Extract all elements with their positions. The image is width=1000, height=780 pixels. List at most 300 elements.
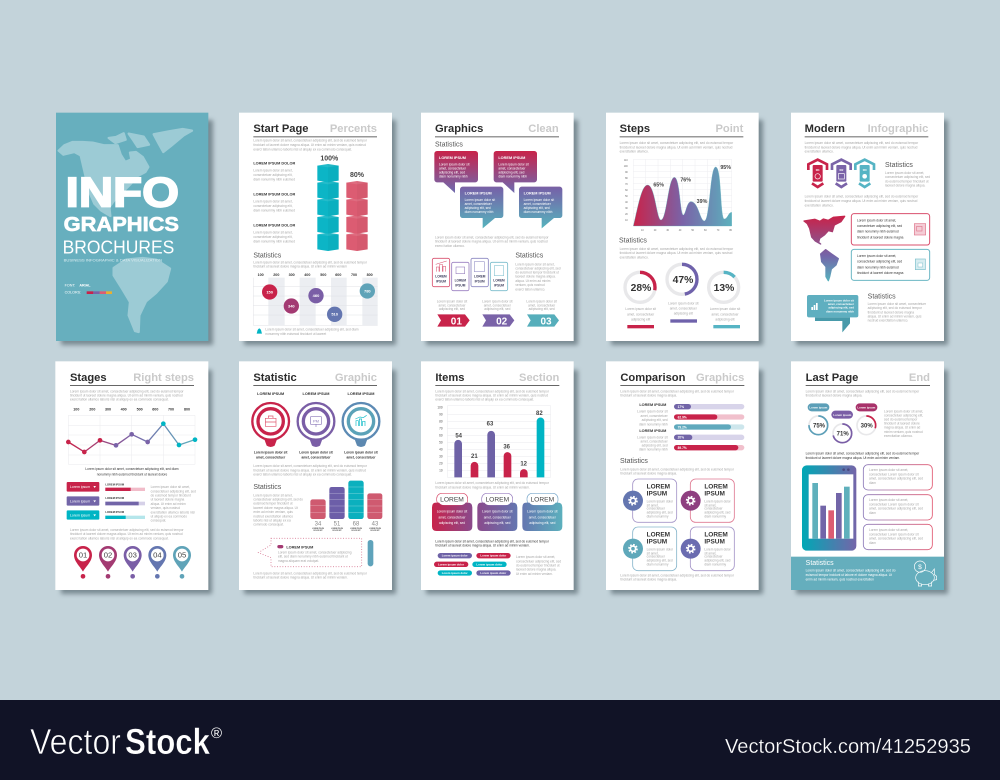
- side text: consectetuer adipiscing elit, sed: [151, 489, 196, 493]
- outlined text box 3: consectetuer Lorem ipsum dolor sit: [869, 532, 919, 536]
- statistics heading: Statistics: [885, 162, 913, 169]
- panel: modern: [791, 113, 944, 341]
- cover title: FONT:: [65, 284, 75, 288]
- column headers: LOREM IPSUM: [347, 392, 375, 396]
- side text: minim veniam, quis nostrud: [884, 430, 923, 434]
- bar chart: 50: [439, 441, 443, 445]
- ring badge: presentation: [298, 403, 334, 447]
- outlined text box 3: diam: [869, 541, 876, 545]
- statistics text: Lorem ipsum dolor sit amet, consectetuer: [868, 302, 927, 306]
- line chart: 100: [73, 408, 79, 412]
- bar chart: 30: [439, 455, 443, 459]
- body text: Lorem ipsum dolor sit amet, consectetuer adipiscing elit, sed do euismod tempor: [435, 235, 550, 239]
- heading: Items: [435, 372, 464, 384]
- line chart: 800: [184, 408, 190, 412]
- bubble chart: [253, 273, 378, 325]
- heading: Last Page: [806, 372, 858, 384]
- outlined text box 1: diam: [869, 481, 876, 485]
- heading: Comparison: [620, 372, 686, 384]
- cylinder stacks: LOREM IPSUM: [312, 528, 324, 530]
- brand logo: Stock: [125, 721, 211, 762]
- statistics text: tincidunt ut laoreet dolore magna aliqua. Ut enim ad minim veniam, quis nostrud: [620, 251, 733, 255]
- gear card 1: Lorem ipsum dolor: [647, 499, 674, 503]
- footer text: Lorem ipsum dolor sit amet, consectetuer adipiscing elit, sed do euismod tempor: [620, 573, 735, 577]
- bar chart: 82: [536, 411, 543, 417]
- area chart: 40: [625, 202, 628, 204]
- footer band: euismod tempor incidunt ut labore et dolore magna aliqua. Ut: [806, 573, 892, 577]
- footer band: Statistics: [806, 560, 834, 567]
- label pills: Lorem ipsum dolor: [442, 571, 468, 575]
- heading: Graphics: [696, 372, 744, 384]
- bar chart: 60: [439, 434, 443, 438]
- tab card 1: amet, consectetuer: [438, 515, 466, 519]
- statistics text: Lorem ipsum dolor sit amet, consectetuer adipiscing elit, sed do euismod tempor: [620, 247, 734, 251]
- heading: Right steps: [133, 372, 194, 384]
- panel: graphics: [421, 113, 574, 341]
- statistics text: tincidunt ut laoreet dolore magna aliqua. Ut enim ad minim veniam: [253, 265, 347, 269]
- chart caption: Lorem ipsum dolor sit amet, consectetuer adipiscing elit, sed diam: [85, 467, 179, 471]
- callout box: crimson: diam nonummy nibh euismod: [857, 230, 899, 234]
- line chart: 700: [168, 408, 174, 412]
- area chart: 100: [624, 166, 628, 168]
- heading: Infographic: [868, 123, 928, 135]
- intro text: tincidunt ut laoreet dolore magna aliqua.: [620, 394, 677, 398]
- brand logo: Vector: [30, 721, 121, 762]
- gear card 3: consectetuer: [647, 555, 666, 559]
- outlined text box 2: consectetuer Lorem ipsum dolor sit: [869, 502, 919, 506]
- area chart: 10: [625, 220, 628, 222]
- cylinder stacks: DOLOR SIT: [332, 530, 342, 532]
- gear card 4: diam nonummy: [704, 562, 727, 566]
- intro text: [253, 139, 368, 151]
- outlined text box 3: amet, consectetuer adipiscing elit, sed: [869, 537, 923, 541]
- footer text: tincidunt ut laoreet dolore magna aliqua.: [620, 577, 677, 581]
- step captions: [437, 300, 557, 311]
- label pills: [434, 553, 511, 576]
- heading: Clean: [528, 123, 559, 135]
- body text: exerci tation ullamco laboris nisi ut aliquip ex ea commodo consequat.: [70, 536, 169, 540]
- gear card 1: LOREM: [647, 484, 670, 491]
- speech bubbles: amet, consectetuer: [524, 202, 552, 206]
- icon: piggy bank: $: [918, 564, 922, 571]
- tab card 3: [522, 493, 562, 531]
- horizontal progress bars: 17%: [678, 405, 684, 409]
- statistics text: consectetuer adipiscing elit, sed: [515, 266, 561, 270]
- ring captions: Lorem ipsum dolor sit: [344, 451, 379, 455]
- text list: LOREM IPSUM DOLOR: [253, 161, 295, 165]
- cylinder stacks: DOLOR SIT: [351, 530, 361, 532]
- bar chart: 20: [439, 462, 443, 466]
- intro text: [806, 389, 920, 398]
- area chart: 20: [654, 230, 657, 232]
- text list: LOREM IPSUM DOLOR: [253, 223, 295, 227]
- tab card 2: amet, consectetuer: [484, 515, 512, 519]
- bar chart: 70: [439, 427, 443, 431]
- step captions: adipiscing elit, sed: [529, 307, 555, 311]
- side text: [884, 409, 923, 438]
- icon cards: IPSUM: [494, 284, 504, 288]
- line chart: [66, 408, 197, 464]
- gear card 4: consectetuer: [704, 555, 724, 559]
- intro text: tincidunt ut laoreet dolore magna aliqua. Ut enim ad minim veniam, quis nostrud: [435, 394, 548, 398]
- heading: [435, 372, 560, 386]
- statistics text: exercitation ullamco.: [620, 255, 649, 259]
- statistics text: Lorem ipsum dolor sit amet,: [515, 262, 555, 266]
- horizontal progress bars: 20%: [678, 436, 684, 440]
- speech bubbles: [434, 151, 562, 228]
- line chart: 500: [137, 408, 143, 412]
- outlined text box 1: consectetuer Lorem ipsum dolor sit: [869, 472, 919, 476]
- line chart: 200: [89, 408, 95, 412]
- column headers: [257, 392, 375, 396]
- progress bars: LOREM IPSUM: [105, 510, 125, 514]
- dark body text: tincidunt ut laoreet dolore magna aliqua. Ut enim ad minim veniam.: [435, 544, 530, 548]
- intro text: Lorem ipsum dolor sit amet, consectetuer adipiscing elit, sed do euismod tempor: [805, 141, 919, 145]
- icon cards: LOREM: [435, 275, 447, 279]
- gear card 4: adipiscing elit, sed: [704, 559, 731, 563]
- speech bubbles: adipiscing elit, sed: [465, 206, 491, 210]
- text list: diam nonummy nibh euismod: [253, 177, 295, 181]
- hexagon badges: 001: [816, 170, 820, 172]
- footer band: [791, 557, 944, 590]
- cube column 80%: 80%: [350, 172, 365, 179]
- bar labels: [637, 403, 669, 452]
- gear card 1: adipiscing elit, sed: [647, 511, 673, 515]
- side text: tincidunt ut laoreet dolore: [884, 422, 920, 426]
- intro text: Lorem ipsum dolor sit amet, consectetuer adipiscing elit, sed do euismod tempor: [70, 389, 185, 393]
- side text: Lorem ipsum dolor sit amet,: [516, 555, 555, 559]
- speech bubbles: Lorem ipsum dolor sit: [498, 162, 529, 166]
- tab card 3: amet, consectetuer: [529, 515, 557, 519]
- intro text: tincidunt ut laoreet dolore magna aliqua. Ut enim ad minim veniam, quis nostrud: [70, 394, 183, 398]
- intro text: Lorem ipsum dolor sit amet, consectetuer adipiscing elit, sed do euismod tempor: [806, 389, 920, 393]
- body text: [435, 235, 550, 248]
- footer band: Lorem ipsum dolor sit amet, consectetuer adipiscing elit, sed do: [806, 569, 896, 573]
- statistics heading: Statistics: [868, 293, 896, 300]
- cover title: GRAPHICS: [64, 214, 179, 236]
- side text: consectetuer adipiscing elit,: [884, 413, 923, 417]
- statistics text: [868, 302, 927, 323]
- body text: [805, 195, 919, 207]
- outlined text box 2: diam: [869, 511, 876, 515]
- icon: piggy bank: [914, 561, 937, 586]
- statistics heading: Statistics: [620, 458, 648, 465]
- bubble chart: 200: [273, 273, 279, 277]
- callout box: crimson: consectetuer adipiscing elit, sed: [857, 224, 902, 228]
- speech bubbles: amet, consectetuer: [465, 202, 493, 206]
- side text: aliqua. Ut enim ad minim: [151, 502, 186, 506]
- area chart: 110: [624, 160, 628, 162]
- bubble chart: 400: [304, 273, 310, 277]
- statistics text: [885, 171, 930, 187]
- bubble chart: 340: [288, 303, 295, 308]
- cube column 80%: [346, 172, 368, 251]
- statistics text: [253, 493, 303, 527]
- map pins 01-05: 02: [104, 551, 112, 560]
- dotted arrow callout: magna aliquam erat volutpat.: [278, 559, 319, 563]
- callout box: teal: tincidunt ut laoreet dolore magna: [857, 271, 904, 275]
- tab card 3: Lorem ipsum dolor sit: [527, 510, 558, 514]
- outlined text box 1: [863, 465, 932, 490]
- statistics text: [620, 467, 735, 475]
- numbered ribbons: [437, 314, 559, 328]
- dark body text: [435, 539, 550, 548]
- tab card 1: Lorem ipsum dolor sit: [437, 510, 467, 514]
- text list: consectetuer adipiscing elit,: [253, 173, 293, 177]
- gear card 1: sit amet,: [647, 503, 659, 507]
- intro text: [620, 389, 735, 398]
- panel: start page: [239, 113, 392, 341]
- page shadows: [61, 120, 948, 594]
- intro text: Lorem ipsum dolor sit amet, consectetuer adipiscing elit, sed do euismod tempor: [620, 389, 735, 393]
- ring badge: presentation: PM: [313, 418, 319, 423]
- intro text: tincidunt ut laoreet dolore magna aliqua. Ut enim ad minim veniam, quis nostrud: [620, 145, 733, 149]
- side text: magna aliqua. Ut enim ad: [884, 426, 921, 430]
- cylinder stacks: 68: [353, 522, 360, 528]
- side text: ut aliquip ex ea commodo: [151, 515, 187, 519]
- gear card 2: diam nonummy: [704, 514, 727, 518]
- intro text: tincidunt ut laoreet dolore magna aliqua. Ut enim ad minim veniam, quis nostrud: [253, 143, 366, 147]
- gear card 4: Lorem ipsum dolor: [704, 547, 732, 551]
- heading: [620, 372, 744, 386]
- dropdown buttons: Lorem ipsum: [70, 499, 90, 503]
- heading: Modern: [805, 123, 845, 135]
- side text: exercitation ullamco laboris nisi: [151, 510, 195, 514]
- horizontal progress bars: 62.9%: [678, 415, 687, 419]
- callout box: crimson: tincidunt ut laoreet dolore magna: [857, 235, 904, 239]
- heading: [620, 123, 744, 137]
- cylinder stacks: 51: [334, 522, 341, 528]
- gear card 3: sit amet,: [647, 551, 659, 555]
- statistics heading: Statistics: [253, 252, 282, 259]
- intro text: exercitation ullamco.: [805, 150, 834, 154]
- statistics text: consectetuer adipiscing elit, sed: [885, 175, 930, 179]
- bar labels: amet, consectetuer: [641, 439, 669, 443]
- side text: Lorem ipsum dolor sit amet,: [151, 485, 190, 489]
- donut: 28%: 28%: [631, 283, 651, 294]
- icon: bell: [257, 328, 262, 334]
- gear card 4: IPSUM: [704, 539, 725, 546]
- side text: Ut enim ad minim veniam.: [516, 572, 553, 576]
- body text: exercitation ullamco.: [805, 203, 834, 207]
- donut: 47%: amet, consectetuer: [670, 307, 698, 311]
- progress bars: [105, 482, 145, 519]
- text list: diam nonummy nibh euismod: [253, 208, 295, 212]
- speech callout: [807, 295, 858, 332]
- tab card 3: LOREM: [530, 497, 554, 504]
- side text: veniam, quis nostrud: [151, 506, 180, 510]
- text list: diam nonummy nibh euismod: [253, 239, 295, 243]
- horizontal progress bars: 79.2%: [678, 425, 687, 429]
- dark body text: Lorem ipsum dolor sit amet, consectetuer adipiscing elit, sed do euismod tempor: [806, 452, 920, 456]
- statistics text: laboris nisi ut aliquip ex ea: [253, 518, 291, 522]
- area chart: [624, 159, 733, 232]
- step captions: adipiscing elit, sed: [439, 307, 465, 311]
- speech bubbles: Lorem ipsum dolor sit: [524, 198, 554, 202]
- bar labels: Lorem ipsum dolor sit: [637, 435, 668, 439]
- intro text: [70, 389, 185, 402]
- gear card 2: adipiscing elit, sed: [704, 511, 731, 515]
- map pins 01-05: 05: [178, 551, 186, 560]
- callout box: teal: [851, 249, 930, 280]
- footer band: enim ad minim veniam, quis nostrud exercitation: [806, 577, 874, 581]
- line chart: 400: [121, 408, 127, 412]
- donut: 47%: adipiscing elit: [674, 312, 693, 316]
- side text: [151, 485, 196, 523]
- intro text: Lorem ipsum dolor sit amet, consectetuer adipiscing elit, sed do euismod tempor: [620, 141, 734, 145]
- donut: 30%: Lorem ipsum: [857, 406, 876, 410]
- donut: 30%: 30%: [861, 424, 873, 430]
- speech bubbles: diam nonummy nibh: [524, 210, 553, 214]
- text list: [253, 161, 295, 243]
- chart caption: [85, 467, 179, 476]
- panel: steps: [606, 113, 759, 341]
- cover world map: [59, 129, 192, 332]
- donut: 75%: 75%: [813, 424, 826, 430]
- chart caption: nonummy nibh euismod tincidunt ut laoreet dolore: [97, 472, 167, 476]
- area chart: 30: [666, 230, 670, 232]
- ring captions: [254, 451, 379, 460]
- speech bubbles: Lorem ipsum dolor sit: [465, 198, 495, 202]
- progress bars: LOREM IPSUM: [105, 482, 125, 486]
- statistics text: adipiscing elit, sed do euismod tempor: [868, 306, 923, 310]
- panel: comparison: [606, 361, 759, 590]
- area chart: 65%: [653, 182, 664, 188]
- donut: 47%: 47%: [673, 275, 693, 286]
- cylinder stacks: LOREM IPSUM: [331, 528, 343, 530]
- side text: ut laoreet dolore magna: [151, 498, 185, 502]
- ring captions: Lorem ipsum dolor sit: [299, 451, 334, 455]
- gear card 4: sit amet,: [704, 551, 716, 555]
- speech callout: diam nonummy nibh: [826, 309, 854, 313]
- bar chart: 100: [437, 406, 443, 410]
- bar chart: 10: [439, 469, 443, 473]
- body text: tincidunt ut laoreet dolore magna aliqua. Ut enim ad minim veniam, quis nostrud: [70, 532, 183, 536]
- area chart: 80: [625, 178, 628, 180]
- step captions: Lorem ipsum dolor sit: [437, 300, 467, 304]
- gear card 2: [681, 479, 734, 522]
- footnote: nonummy nibh euismod tincidunt ut laoreet: [265, 332, 326, 336]
- outlined text box 1: amet, consectetuer adipiscing elit, sed: [869, 477, 923, 481]
- gear card 2: Lorem ipsum dolor: [704, 499, 732, 503]
- ring captions: Lorem ipsum dolor sit: [254, 451, 288, 455]
- footnote: Lorem ipsum dolor sit amet, consectetuer adipiscing elit, sed diam: [265, 328, 359, 332]
- speech bubbles: LOREM IPSUM: [524, 192, 551, 196]
- statistics text: nostrud exercitation ullamco: [253, 514, 293, 518]
- callout box: crimson: [851, 214, 930, 245]
- side text: consequat.: [151, 519, 166, 523]
- intro text: [620, 141, 734, 154]
- bar chart: 21: [471, 454, 478, 460]
- statistics heading: Statistics: [515, 252, 544, 259]
- tablet chart: [802, 465, 856, 551]
- speech bubbles: amet, consectetuer: [439, 166, 467, 170]
- donut: 47%: [667, 264, 699, 323]
- outlined text box 3: [863, 524, 932, 550]
- bar chart: 36: [503, 445, 511, 451]
- text list: consectetuer adipiscing elit,: [253, 204, 293, 208]
- dropdown buttons: Lorem ipsum: [70, 485, 90, 489]
- footnote: [265, 328, 359, 336]
- heading: [253, 372, 377, 386]
- heading: [253, 123, 377, 137]
- bubble chart: 150: [266, 289, 274, 294]
- body text: tincidunt ut laoreet dolore magna aliqua. Ut enim ad minim veniam, quis nostrud: [805, 199, 918, 203]
- callout box: teal: diam nonummy nibh euismod: [857, 265, 899, 269]
- area chart: 30: [625, 208, 628, 210]
- label pills: Lorem ipsum dolor: [476, 562, 503, 566]
- body text: tincidunt ut laoreet dolore magna aliqua. Ut enim ad minim veniam, quis nostrud: [435, 240, 548, 244]
- bubble chart: 700: [351, 273, 357, 277]
- intro text: tincidunt ut laoreet dolore magna aliqua. Ut enim ad minim veniam, quis nostrud: [805, 145, 918, 149]
- tab card 1: LOREM: [440, 497, 464, 504]
- dropdown buttons: [67, 482, 99, 520]
- intro text: [435, 389, 550, 402]
- gear card 2: consectetuer: [704, 507, 724, 511]
- heading: [805, 123, 928, 137]
- cylinder stacks: LOREM IPSUM: [369, 528, 381, 530]
- cube column 100%: 100%: [320, 156, 339, 163]
- cylinder stacks: 34: [315, 522, 322, 528]
- column headers: LOREM IPSUM: [302, 392, 330, 396]
- panel: cover: [56, 113, 208, 341]
- outlined text box 3: Lorem ipsum dolor sit amet,: [869, 528, 908, 532]
- line chart: 300: [105, 408, 111, 412]
- bubble chart: 500: [320, 273, 326, 277]
- area chart: 60: [704, 230, 707, 232]
- bar labels: adipiscing elit, sed: [642, 444, 668, 448]
- side text: sed do euismod tempor: [884, 418, 918, 422]
- heading: End: [909, 372, 930, 384]
- vertical pill: [368, 540, 373, 566]
- cover colour swatches: [87, 291, 112, 294]
- dropdown buttons: Lorem ipsum: [70, 513, 90, 517]
- intro text: exerci tation ullamco laboris nisi ut aliquip ex ea commodo consequat.: [70, 398, 169, 402]
- gear card 3: IPSUM: [647, 539, 667, 546]
- ring captions: amet, consectetuer: [301, 456, 331, 460]
- hexagon badges: 003: [863, 170, 867, 172]
- area chart: 50: [625, 196, 628, 198]
- step captions: adipiscing elit, sed: [484, 307, 511, 311]
- tab card 2: LOREM: [485, 497, 509, 504]
- intro text: tincidunt ut laoreet dolore magna aliqua.: [806, 394, 862, 398]
- icon cards: IPSUM: [436, 280, 446, 284]
- body text: Lorem ipsum dolor sit amet, consectetuer adipiscing elit, sed do euismod tempor: [70, 528, 185, 532]
- bubble chart: 600: [335, 273, 341, 277]
- map pins 01-05: 04: [153, 551, 162, 560]
- ring badge: briefcase: [252, 403, 289, 447]
- intro text: exerci tation ullamco laboris nisi ut aliquip ex ea commodo consequat.: [253, 147, 352, 151]
- heading: [435, 123, 559, 137]
- body text: [435, 481, 550, 489]
- area chart: 70: [625, 184, 628, 186]
- hexagon badges: [808, 160, 874, 187]
- statistics text: [620, 247, 734, 259]
- body text: exerci tation ullamco.: [435, 244, 465, 248]
- donut: 28%: Lorem ipsum dolor sit: [625, 307, 656, 311]
- bubble chart: 780: [364, 288, 371, 293]
- area chart: 39%: [697, 199, 708, 205]
- outlined text box 2: [863, 495, 932, 520]
- bar chart: 40: [439, 448, 443, 452]
- cylinder stacks: LOREM IPSUM: [350, 528, 362, 530]
- text list: LOREM IPSUM DOLOR: [253, 192, 295, 196]
- intro text: exerci tation ullamco laboris nisi ut aliquip ex ea commodo consequat.: [435, 398, 534, 402]
- body text: exerci tation ullamco laboris nisi ut aliquip ex ea commodo consequat.: [253, 472, 352, 476]
- icon cards: LOREM: [474, 275, 486, 279]
- text list: consectetuer adipiscing elit,: [253, 235, 293, 239]
- donut: 71%: [831, 411, 853, 443]
